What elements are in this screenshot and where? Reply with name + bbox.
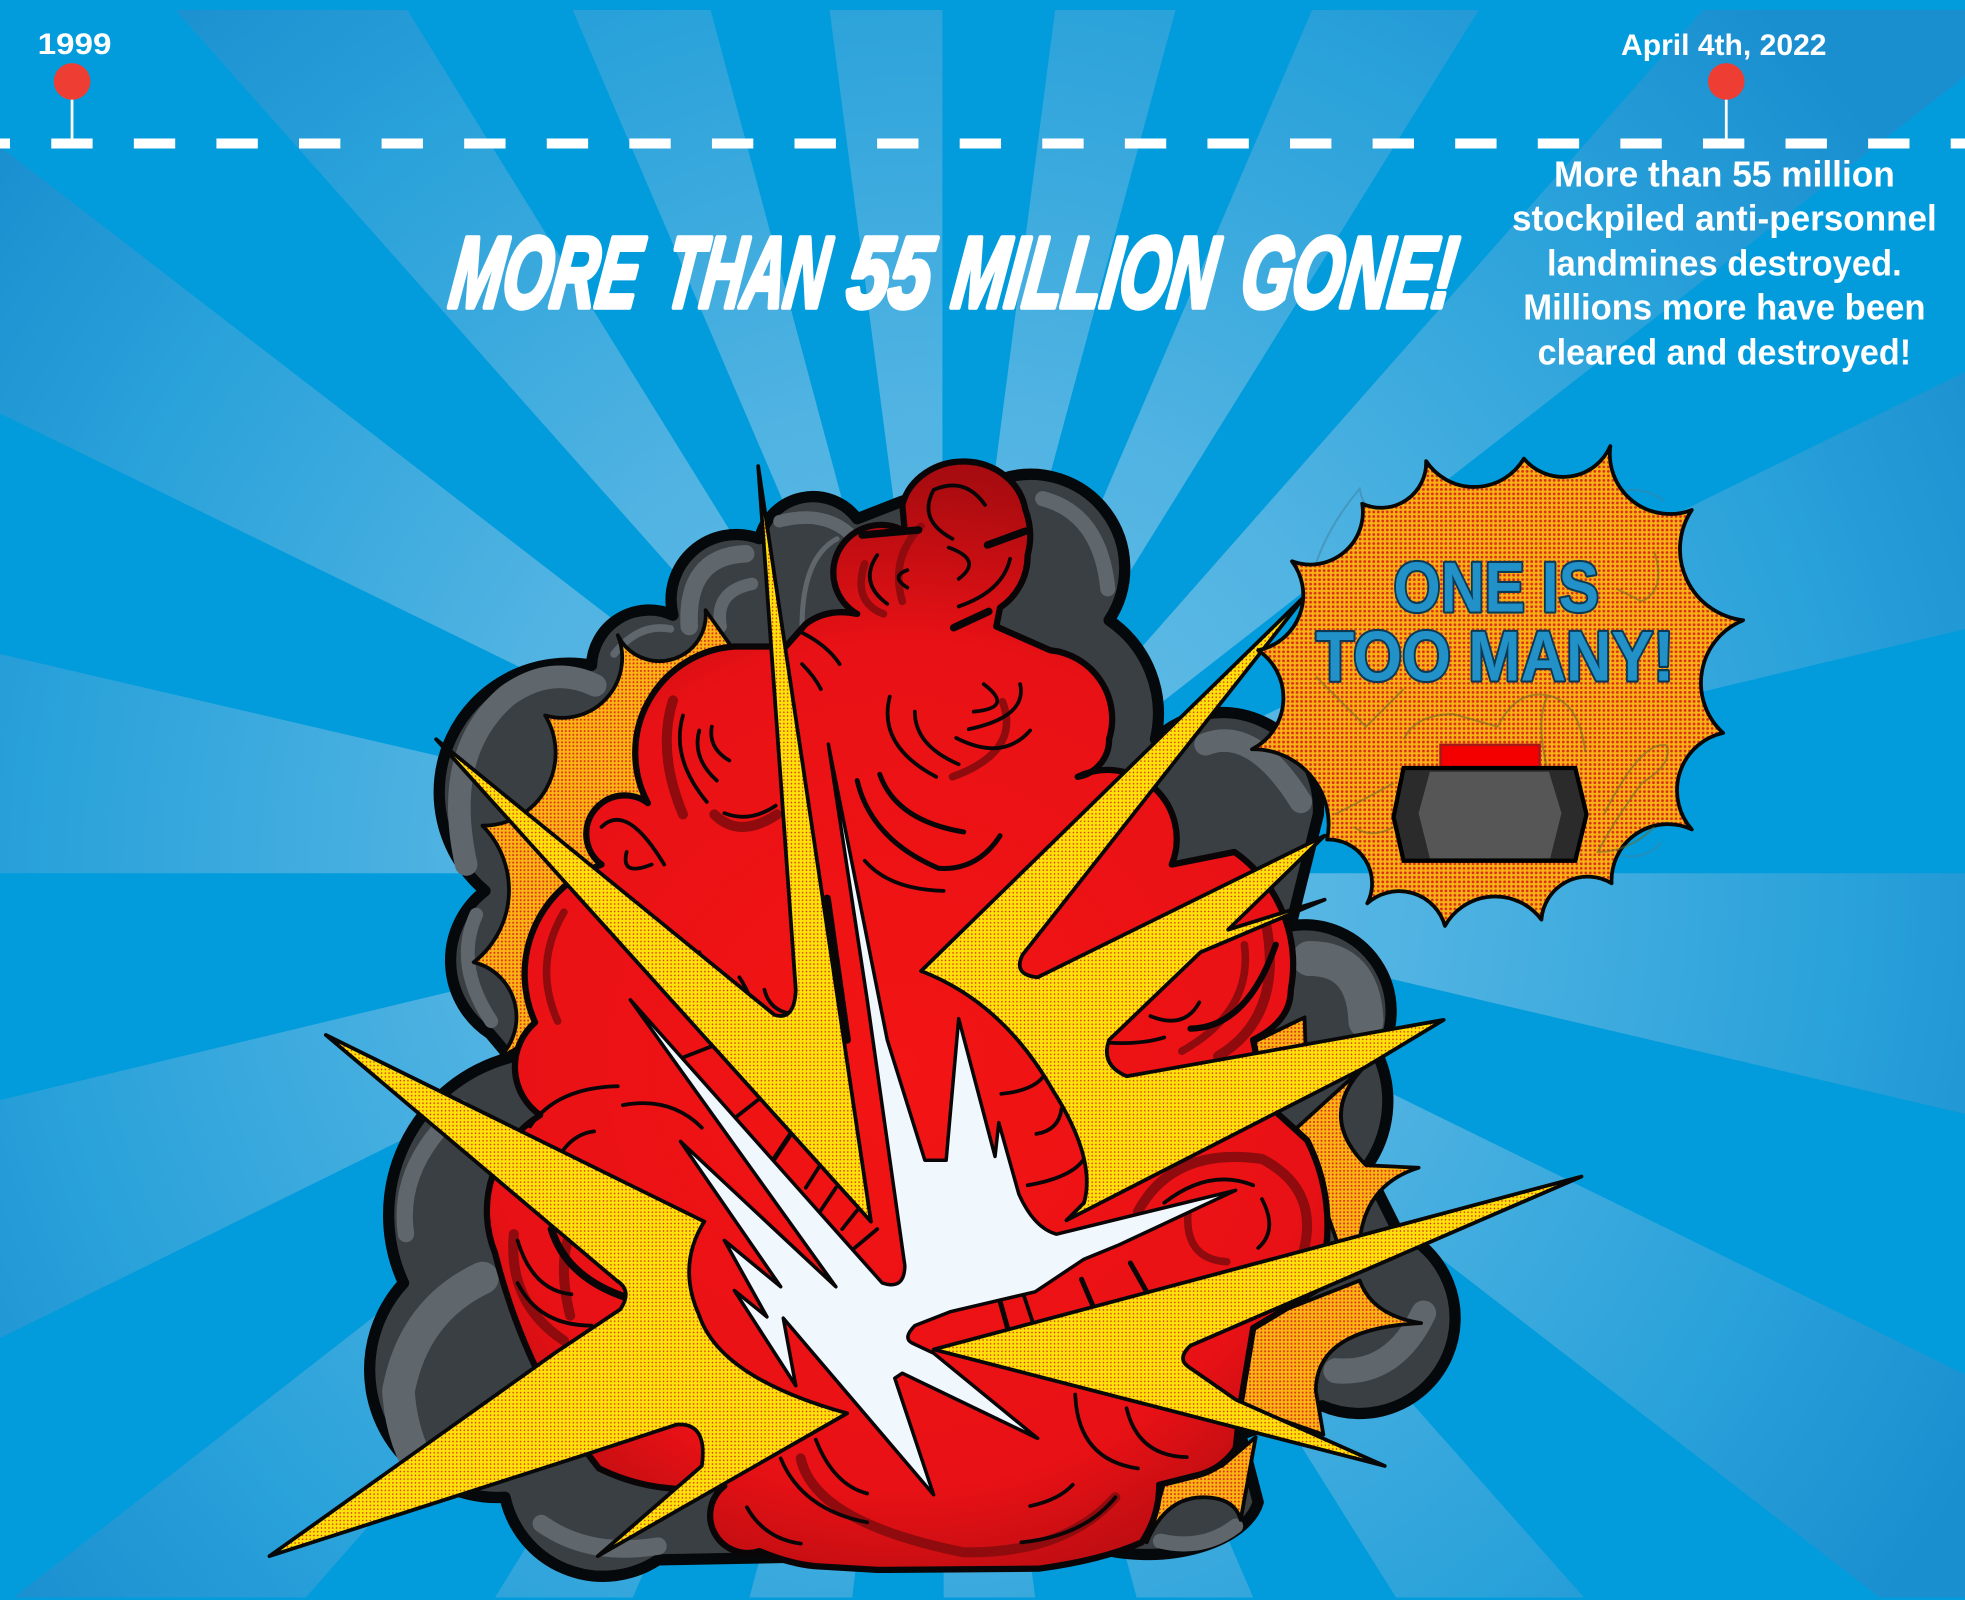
icon: landmine <box>1394 745 1587 861</box>
yellow burst: top and left spikes <box>436 466 871 1222</box>
dark red crescents <box>513 526 1307 1552</box>
timeline marker: April 4th, 2022: April 4th, 2022 <box>1621 29 1827 62</box>
description text block: More than 55 million <box>1554 154 1895 195</box>
grey smoke cloud <box>370 474 1455 1576</box>
headline: 55 <box>842 217 941 329</box>
description text block: Millions more have been <box>1523 287 1926 327</box>
explosion illustration <box>269 461 1582 1576</box>
headline: one is too many: TOO MANY! <box>1316 616 1674 695</box>
timeline marker: 1999 <box>38 28 112 139</box>
orange halftone burst: right pieces <box>1147 1017 1421 1542</box>
orange halftone burst: upper left <box>474 610 739 1061</box>
headline <box>444 217 1464 329</box>
white core burst <box>630 744 1236 1495</box>
description text block: cleared and destroyed! <box>1538 332 1911 373</box>
yellow burst: lower left arm <box>269 1035 847 1556</box>
headline: MILLION <box>947 217 1226 329</box>
red fire cloud <box>487 461 1328 1570</box>
headline: GONE! <box>1235 217 1464 329</box>
headline: THAN <box>660 217 837 329</box>
hand outlines on burst <box>1316 551 1668 852</box>
starburst shape <box>1252 446 1743 926</box>
headline: one is too many <box>1316 547 1674 695</box>
description text block <box>1512 154 1937 373</box>
yellow burst: right spike <box>934 1177 1582 1466</box>
headline: one is too many: ONE IS <box>1394 547 1599 626</box>
headline: MORE <box>444 217 650 329</box>
black ink swirls <box>518 485 1276 1544</box>
callout: one is too many starburst <box>1252 446 1743 926</box>
timeline marker: 1999: 1999 <box>38 28 112 61</box>
timeline dashed line <box>0 139 1965 147</box>
yellow burst: upper right arm <box>921 595 1444 1220</box>
description text block: landmines destroyed. <box>1547 243 1902 284</box>
timeline marker: April 4th, 2022 <box>1621 29 1827 139</box>
faint hand outlines behind burst <box>1316 489 1664 856</box>
description text block: stockpiled anti-personnel <box>1512 198 1937 239</box>
